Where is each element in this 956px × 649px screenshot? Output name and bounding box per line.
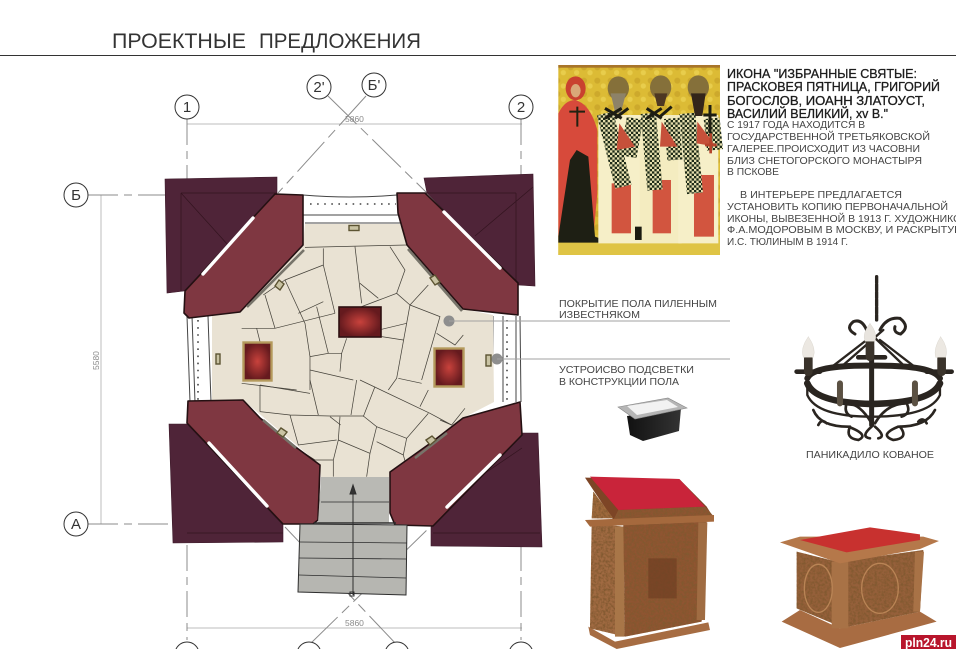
icon heading: ПРАСКОВЕЯ ПЯТНИЦА, ГРИГОРИЙ xyxy=(727,79,940,94)
roof hip lines xyxy=(181,187,540,533)
dimension labels: 5860 xyxy=(345,114,364,124)
icon heading: ВАСИЛИЙ ВЕЛИКИЙ, xv В." xyxy=(727,106,888,121)
provenance text: ГОСУДАРСТВЕННОЙ ТРЕТЬЯКОВСКОЙ xyxy=(727,130,930,143)
icon description xyxy=(727,67,956,248)
title xyxy=(112,30,421,53)
callout dots xyxy=(444,316,502,364)
axis marker labels: 2 xyxy=(517,99,525,116)
axis markers xyxy=(64,73,533,649)
dimension labels xyxy=(91,114,364,628)
proposal text: УСТАНОВИТЬ КОПИЮ ПЕРВОНАЧАЛЬНОЙ xyxy=(727,200,948,213)
floor plan xyxy=(64,73,730,649)
axis marker labels: Б xyxy=(71,187,81,204)
axis marker labels: Б' xyxy=(368,77,380,94)
provenance text: С 1917 ГОДА НАХОДИТСЯ В xyxy=(727,119,865,131)
chandelier caption: ПАНИКАДИЛО КОВАНОЕ xyxy=(806,449,934,461)
Paraskeva figure xyxy=(558,76,612,243)
dimension labels: 5580 xyxy=(91,351,101,370)
red chapel niches xyxy=(184,193,522,526)
proposal text: В ИНТЕРЬЕРЕ ПРЕДЛАГАЕТСЯ xyxy=(740,189,902,201)
title: ПРОЕКТНЫЕ xyxy=(112,30,246,53)
dark roof corners xyxy=(165,174,542,547)
axis marker labels: А xyxy=(71,516,81,533)
icon: carved wood kiot xyxy=(780,527,939,648)
floor light fixtures xyxy=(216,226,491,445)
floor covering caption: ПОКРЫТИЕ ПОЛА ПИЛЕННЫМ xyxy=(559,298,717,310)
icon heading xyxy=(727,67,940,121)
axis lines and dimensions xyxy=(88,96,522,645)
provenance text: В ПСКОВЕ xyxy=(727,166,779,178)
lighting caption: УСТРОИСВО ПОДСВЕТКИ xyxy=(559,364,694,376)
icon heading: ИКОНА "ИЗБРАННЫЕ СВЯТЫЕ: xyxy=(727,67,917,81)
provenance text xyxy=(727,119,930,178)
entrance stairs xyxy=(298,477,407,596)
proposal text: И.С. ТЮЛИНЫМ В 1914 Г. xyxy=(727,236,848,248)
floor stone joints xyxy=(242,245,465,477)
axis marker labels: 2' xyxy=(313,79,325,96)
icon: carved wood lectern xyxy=(585,477,714,649)
callout leaders xyxy=(449,321,730,359)
axis marker labels: 1 xyxy=(183,99,191,116)
lighting caption xyxy=(559,364,694,388)
provenance text: ГАЛЕРЕЕ.ПРОИСХОДИТ ИЗ ЧАСОВНИ xyxy=(727,143,920,155)
limestone floor xyxy=(212,224,494,478)
icon: three saints and Paraskeva xyxy=(558,65,720,255)
paintings xyxy=(244,307,464,386)
outer walls xyxy=(187,195,521,402)
icon heading: БОГОСЛОВ, ИОАНН ЗЛАТОУСТ, xyxy=(727,94,925,108)
bishops xyxy=(598,75,718,243)
proposal text xyxy=(727,189,956,248)
title: ПРЕДЛОЖЕНИЯ xyxy=(259,30,421,53)
wall shelves xyxy=(247,249,462,458)
proposal text: Ф.А.МОДОРОВЫМ В МОСКВУ, И РАСКРЫТУЮ xyxy=(727,224,956,236)
floor covering caption: ИЗВЕСТНЯКОМ xyxy=(559,309,640,321)
icon: floor lamp fixture xyxy=(618,398,687,441)
white window strips xyxy=(203,212,500,507)
dimension labels: 5860 xyxy=(345,618,364,628)
lighting caption: В КОНСТРУКЦИИ ПОЛА xyxy=(559,376,679,388)
floor covering caption xyxy=(559,298,717,321)
icon: wrought iron chandelier xyxy=(797,277,952,440)
provenance text: БЛИЗ СНЕТОГОРСКОГО МОНАСТЫРЯ xyxy=(727,155,922,167)
axis marker labels xyxy=(71,77,525,649)
